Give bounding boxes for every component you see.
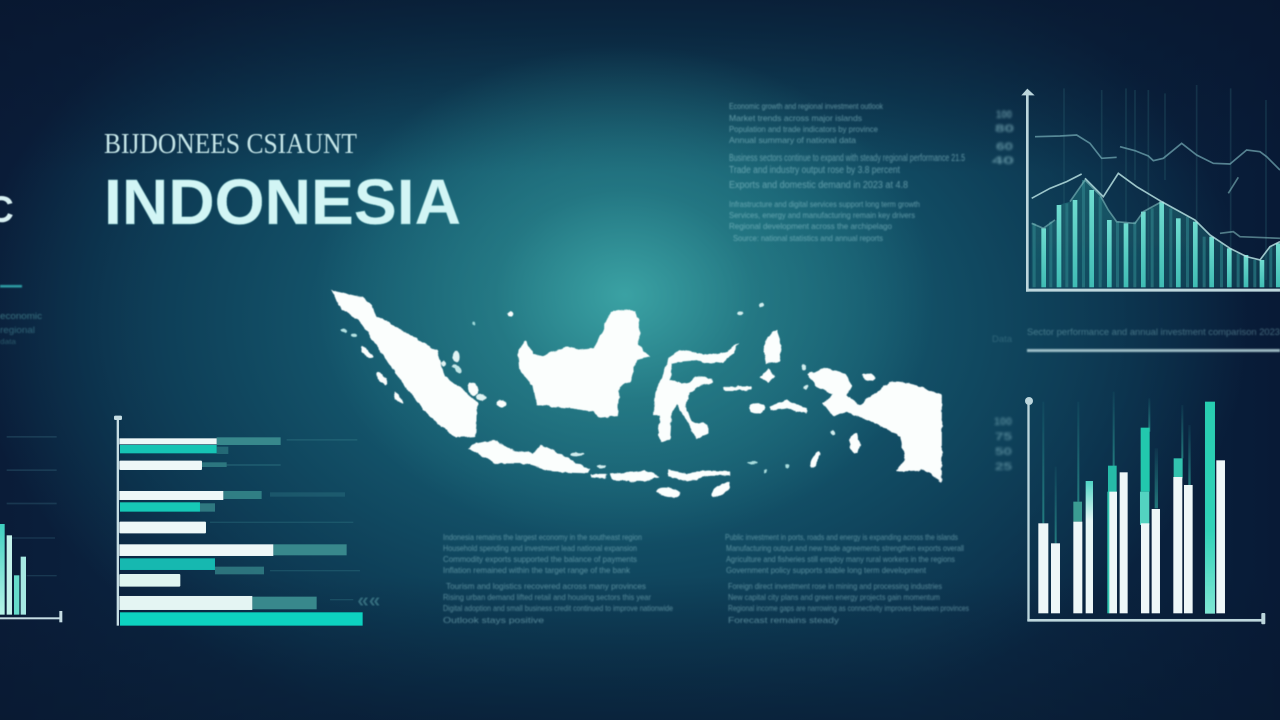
text block: upper right: Population and trade indicators by province — [729, 124, 878, 134]
Papua — [807, 367, 942, 482]
text block: bottom centre right: Regional income gaps are narrowing as connectivity improves between provinces — [728, 603, 969, 613]
text block: bottom centre left: Outlook stays positive — [443, 615, 544, 625]
axis — [0, 611, 62, 622]
text block: upper right: Services, energy and manufacturing remain key drivers — [729, 210, 915, 220]
Java — [468, 440, 590, 473]
middle trend line — [1032, 173, 1280, 260]
labels beside bottom right chart: 100 — [994, 416, 1012, 428]
bars — [0, 524, 26, 615]
chart heading strip: Sector performance and annual investment comparison 2023 — [1027, 327, 1280, 337]
column chart, bottom right — [1025, 392, 1265, 624]
text block: bottom centre right: Forecast remains steady — [728, 615, 840, 625]
eastern small islands — [737, 303, 876, 473]
axes — [1025, 397, 1265, 624]
left cropped bar chart — [0, 436, 62, 622]
axes — [1021, 89, 1280, 292]
upper trend line — [1035, 135, 1280, 170]
line and bar chart, top right — [1021, 85, 1280, 292]
title: INDONESIA — [104, 166, 461, 238]
Sumatra side islands — [341, 311, 513, 407]
text block: bottom centre left: Rising urban demand lifted retail and housing sectors this year — [443, 592, 651, 602]
text block: upper right: Annual summary of national data — [729, 135, 856, 145]
Maluku — [749, 330, 807, 413]
text block: bottom centre left: Indonesia remains the largest economy in the southeast region — [443, 532, 642, 542]
labels beside bottom right chart: 25 — [995, 461, 1012, 473]
horizontal bar chart — [114, 416, 380, 626]
labels beside bottom right chart — [994, 416, 1012, 473]
text block: bottom centre left: Commodity exports supported the balance of payments — [443, 554, 637, 564]
ridge line — [1032, 177, 1280, 238]
text block: bottom centre left: Household spending and investment lead national expansion — [443, 543, 637, 553]
faint bar tracks — [210, 439, 360, 600]
text block: upper right: Regional development across the archipelago — [729, 221, 892, 231]
thin teal stems — [1042, 392, 1191, 543]
axis — [114, 416, 122, 626]
labels beside top right chart: 40 — [992, 155, 1014, 167]
text block: bottom centre right: Foreign direct investment rose in mining and processing industries — [728, 581, 942, 591]
labels beside top right chart: 80 — [995, 123, 1014, 135]
labels beside top right chart: 60 — [996, 141, 1013, 153]
text block: upper right — [729, 101, 965, 243]
left accent rule and note: data — [0, 339, 16, 346]
left accent rule and note: economic — [0, 311, 43, 321]
western islands — [331, 290, 650, 481]
bright bars — [1041, 190, 1280, 287]
text block: upper right: Exports and domestic demand in 2023 at 4.8 — [729, 180, 908, 191]
text block: bottom centre right: Manufacturing output and new trade agreements strengthen exports overall — [726, 543, 964, 553]
dim bars — [1033, 180, 1272, 287]
teal bars — [120, 445, 363, 626]
text block: upper right: Economic growth and regional investment outlook — [729, 101, 884, 111]
labels beside bottom right chart: 50 — [995, 446, 1012, 458]
text block: upper right: Market trends across major islands — [729, 113, 862, 123]
shaded area under curve — [1032, 180, 1280, 287]
text block: bottom centre left: Inflation remained within the target range of the bank — [443, 565, 631, 575]
small marker icon: «« — [357, 589, 380, 612]
text block: upper right: Business sectors continue to expand with steady regional performance 21.5 — [729, 153, 965, 164]
map of Indonesia — [331, 290, 942, 500]
text block: upper right: Trade and industry output rose by 3.8 percent — [729, 165, 900, 176]
left accent rule and note: regional — [0, 325, 35, 335]
Sulawesi — [653, 343, 738, 442]
labels beside bottom right chart: 75 — [995, 431, 1012, 443]
left accent rule and note — [0, 285, 43, 346]
Sumatra — [331, 290, 477, 437]
text block: bottom centre right — [725, 532, 969, 625]
chart heading strip: Data — [992, 334, 1012, 344]
text block: bottom centre right: Government policy supports stable long term development — [726, 565, 927, 575]
Lesser Sunda islands — [630, 470, 732, 500]
chart heading strip — [992, 327, 1280, 352]
text block: bottom centre right: Agriculture and fisheries still employ many rural workers in the regions — [726, 554, 955, 564]
Kalimantan — [518, 309, 650, 418]
text block: bottom centre left — [443, 532, 673, 625]
labels beside top right chart: 100 — [996, 109, 1012, 121]
text block: upper right: Source: national statistics and annual reports — [733, 233, 883, 243]
text block: upper right: Infrastructure and digital services support long term growth — [729, 199, 920, 209]
white columns — [1038, 460, 1225, 613]
eastern islands — [630, 303, 942, 500]
secondary bars — [200, 437, 347, 609]
white bars — [119, 438, 273, 610]
text block: bottom centre right: Public investment in ports, roads and energy is expanding across the islands — [725, 532, 958, 542]
text block: bottom centre right: New capital city plans and green energy projects gain momentum — [728, 592, 940, 602]
text block: bottom centre left: Tourism and logistics recovered across many provinces — [446, 581, 646, 591]
small islands east of Java — [570, 452, 643, 481]
teal column sections — [1073, 402, 1215, 614]
faint guide lines — [7, 436, 57, 576]
text block: bottom centre left: Digital adoption and small business credit continued to improve nationwide — [443, 603, 673, 613]
faint vertical grid — [1064, 85, 1266, 280]
subtitle: BIJDONEES CSIAUNT — [104, 128, 357, 160]
labels beside top right chart — [992, 109, 1014, 167]
